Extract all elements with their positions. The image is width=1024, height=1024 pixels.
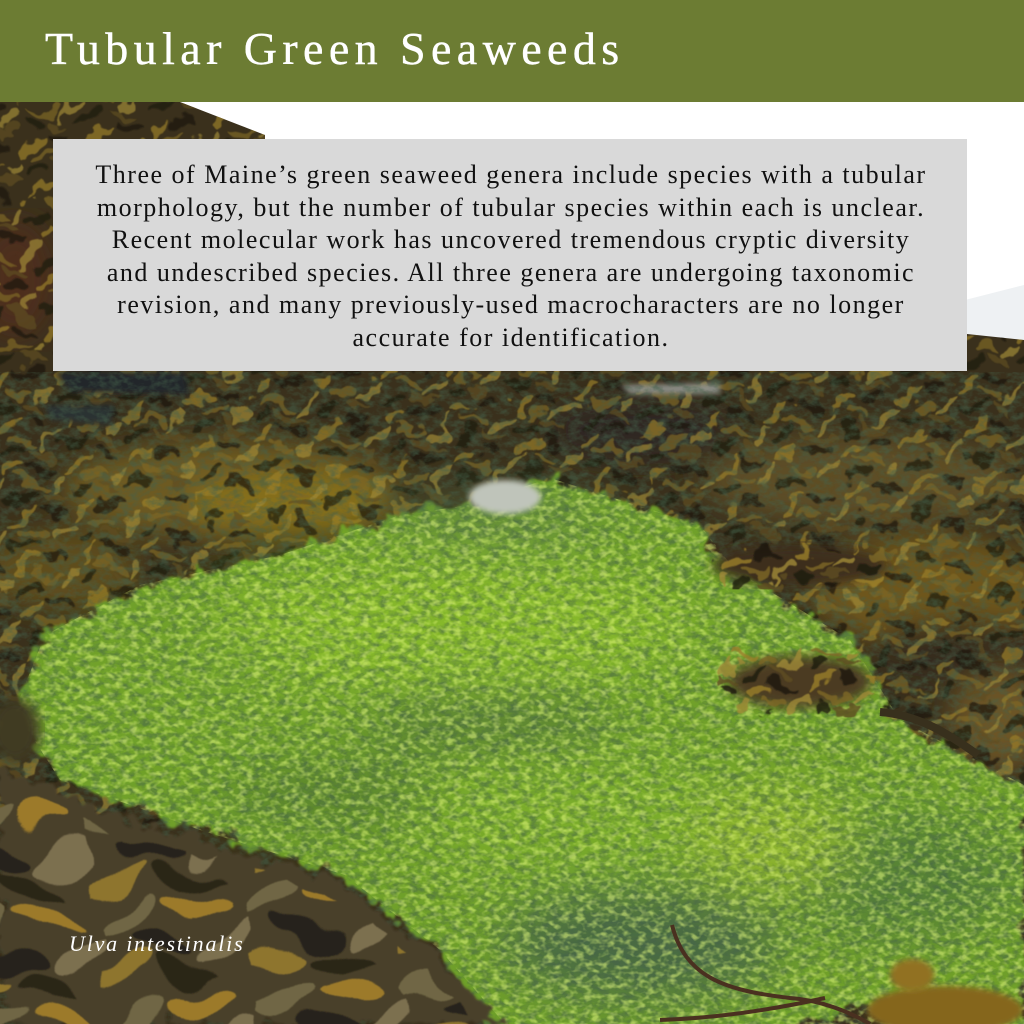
- foreground golden seaweed, bottom right: [867, 959, 1023, 1024]
- header bar: [0, 0, 1024, 102]
- green tones: [70, 506, 1020, 1000]
- dark rocks: [45, 372, 720, 425]
- body text: [95, 160, 927, 352]
- foreground golden seaweed, bottom left: [0, 698, 500, 1024]
- golden seaweed clumps: [0, 400, 1024, 770]
- tide pool: [469, 480, 541, 514]
- seaweed clumps on green mat: [712, 545, 978, 755]
- body text: morphology, but the number of tubular species within each is unclear.: [97, 192, 925, 222]
- green seaweed mat: [15, 478, 1024, 1024]
- body text: accurate for identification.: [352, 322, 670, 352]
- photo caption: Ulva intestinalis: [69, 931, 244, 956]
- sky: [0, 102, 1024, 372]
- dark rock and seaweed, top left: [0, 220, 55, 340]
- brown stipes: [660, 925, 870, 1024]
- body text: revision, and many previously-used macrocharacters are no longer: [117, 290, 905, 319]
- body text: Three of Maine’s green seaweed genera include species with a tubular: [95, 160, 927, 189]
- text panel: [53, 139, 967, 371]
- texture: [0, 372, 1024, 1024]
- seaweed frond texture: [0, 62, 1024, 822]
- title: Tubular Green Seaweeds: [45, 23, 625, 74]
- body text: Recent molecular work has uncovered tremendous cryptic diversity: [112, 225, 910, 254]
- body text: and undescribed species. All three genera are undergoing taxonomic: [107, 258, 915, 286]
